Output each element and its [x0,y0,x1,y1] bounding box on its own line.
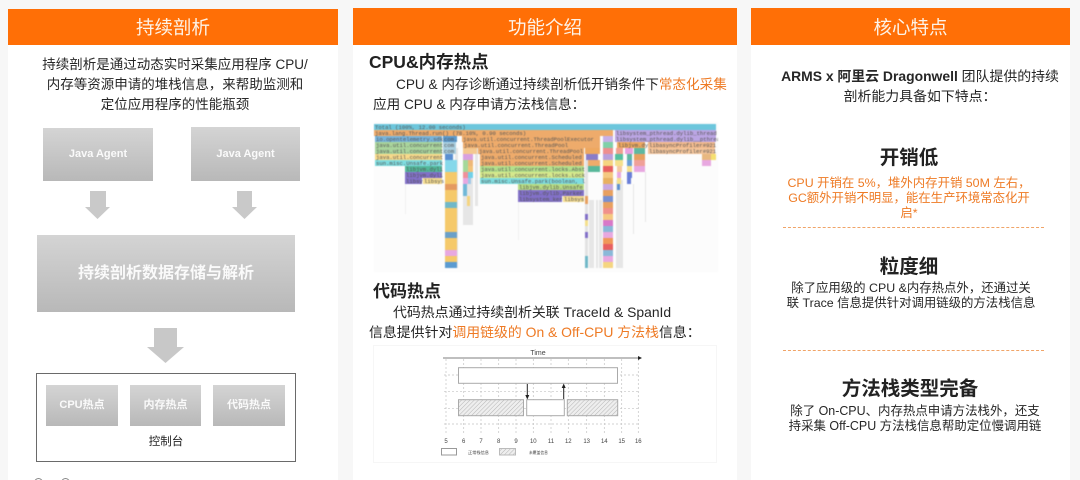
box: code hotspot [213,385,285,426]
intro text [42,57,308,112]
chart: flame graph: java.util.concurrent.locks.Abst [481,166,585,173]
chart: flame graph: libsys [424,178,444,185]
chart: on and off CPU timeline: 6 [462,439,466,445]
chart: flame graph: libasyncProfiler#921 [649,142,717,149]
chart: flame graph: com. [444,136,457,143]
chart: flame graph: java.util.concurrent [376,142,443,149]
panel: 持续剖析 [8,9,338,480]
feature description [787,281,1035,310]
chart: flame graph: java.util.concurrent.ThreadPool [479,148,584,155]
chart: on and off CPU timeline: 14 [601,439,608,445]
feature description: 启* [900,206,918,220]
intro text: 持续剖析是通过动态实时采集应用程序 CPU/ [42,57,308,72]
chart: on and off CPU timeline: 7 [479,439,483,445]
description: CPU & memory [373,77,727,112]
description: CPU & memory: CPU & 内存诊断通过持续剖析低开销条件下常态化采集 [396,77,727,92]
chart: flame graph: libsys [564,196,584,203]
feature description: CPU 开销在 5%，堆外内存开销 50M 左右， [787,176,1031,190]
chart: flame graph: libasyncProfiler#921 [649,148,717,155]
arrow: storage down [147,328,184,363]
chart: on and off CPU timeline: Time [530,350,546,357]
heading: 核心特点: 核心特点 [873,17,948,38]
chart: flame graph: sun.misc.Unsafe.park [376,160,444,167]
feature title: 方法栈类型完备 [842,378,978,400]
console frame [36,373,296,462]
chart: flame graph: java.util.concurrent [376,148,443,155]
chart: flame graph: java.util.concurrent.Scheduled [481,154,582,161]
heading: 核心特点 [751,8,1070,45]
box: Java Agent right [191,127,300,181]
arrow: left agent down [85,191,110,219]
chart: on and off CPU timeline: 8 [497,439,501,445]
box: Java Agent right: Java Agent [216,148,275,160]
feature description: 持采集 Off-CPU 方法栈信息帮助定位慢调用链 [789,419,1041,433]
description: code hotspot [369,304,701,340]
chart: flame graph: libjvm.dyli [406,172,444,179]
box: storage and analysis: 持续剖析数据存储与解析 [78,265,254,282]
intro text: ARMS x 阿里云 Dragonwell 团队提供的持续 [781,68,1059,84]
heading: 功能介绍: 功能介绍 [508,17,582,38]
chart: flame graph: libjvm.dyli [406,166,444,173]
heading: 持续剖析 [8,9,338,45]
feature description: 联 Trace 信息提供针对调用链级的方法栈信息 [787,296,1035,310]
chart: flame graph: libjvm.dylib.Parker [519,190,583,197]
arrow: right agent down [232,191,257,219]
chart: flame graph: com [444,142,455,149]
chart: on and off CPU timeline: 12 [565,439,572,445]
subheading: code hotspot: 代码热点 [373,282,441,301]
chart: flame graph: java.util.concurrent.Scheduled [481,160,582,167]
chart: flame graph: java.util.concurrent.locks.Lock [481,172,586,179]
chart: flame graph [373,123,718,269]
feature title: 开销低 [880,147,938,169]
feature: low overhead [787,147,1031,220]
box: Java Agent left: Java Agent [69,148,127,160]
chart: on and off CPU timeline: 5 [444,439,448,445]
box: memory hotspot [130,385,201,426]
chart: flame graph: libsystem_pthread.dylib_thread [616,130,717,137]
chart: flame graph: libsystem_ker [519,196,563,203]
intro text [781,68,1059,104]
chart: flame graph: java.util.concurrent.ThreadPoolExecutor [463,136,594,143]
feature description [789,404,1041,433]
chart: flame graph: sun.misc.Unsafe.park(boolean, l [481,178,586,185]
intro text: 定位应用程序的性能瓶颈 [101,97,249,112]
chart: flame graph: libjvm.dylib.Unsafe [519,184,583,191]
chart: flame graph: com [444,148,455,155]
subheading: CPU & memory hotspot: CPU&内存热点 [369,52,489,72]
box: CPU hotspot [46,385,118,426]
chart: on and off CPU timeline: 11 [548,439,555,445]
feature: fine granularity [787,256,1035,310]
chart: on and off CPU timeline: 9 [514,439,518,445]
panel: 功能介绍 [353,8,737,480]
box: storage and analysis [37,235,295,312]
console label: 控制台 [149,436,183,448]
feature: complete stack types [789,378,1041,433]
feature description [787,176,1031,220]
chart: flame graph: java.util.concurrent.ThreadPool [464,142,569,149]
chart: on and off CPU timeline: 10 [530,439,537,445]
heading: 功能介绍 [353,8,737,45]
feature description: GC额外开销不明显，能在生产环境常态化开 [788,191,1030,205]
chart: flame graph: libjvm.dy [618,142,649,149]
chart: flame graph: io.opentelemetry.sdk [376,136,444,143]
box: Java Agent left [43,128,153,181]
chart: on and off CPU timeline: 未覆盖信息 [529,450,548,455]
description: code hotspot: 信息提供针对调用链级的 On & Off-CPU 方法栈信息： [369,324,701,340]
intro text: 剖析能力具备如下特点： [844,88,996,104]
chart: on and off CPU timeline: 15 [618,439,626,445]
description: CPU & memory: 应用 CPU & 内存申请方法栈信息： [373,97,585,112]
chart: on and off CPU timeline: 正常栈信息 [468,449,489,456]
box: code hotspot: 代码热点 [227,399,271,411]
chart: on and off CPU timeline: 13 [583,439,591,445]
feature title: 粒度细 [880,256,938,278]
chart: flame graph: Total (100%, 12.00 seconds) [375,124,466,131]
heading: 持续剖析: 持续剖析 [136,17,210,38]
chart: flame graph: libsy [406,178,423,185]
intro text: 内存等资源申请的堆栈信息，来帮助监测和 [47,77,303,92]
chart: on and off CPU timeline: 16 [635,439,642,445]
panel: 核心特点 [751,8,1070,480]
chart: flame graph: java.util.concurrent [376,154,443,161]
chart: flame graph: java.lang.Thread.run() (78.10%, 0.90 seconds) [375,130,526,137]
chart: on and off CPU timeline [373,345,717,463]
feature description: 除了 On-CPU、内存热点申请方法栈外，还支 [790,404,1040,418]
box: memory hotspot: 内存热点 [144,399,188,411]
feature description: 除了应用级的 CPU &内存热点外，还通过关 [791,281,1031,295]
box: CPU hotspot: CPU热点 [59,399,105,411]
description: code hotspot: 代码热点通过持续剖析关联 TraceId & SpanId [393,304,671,320]
